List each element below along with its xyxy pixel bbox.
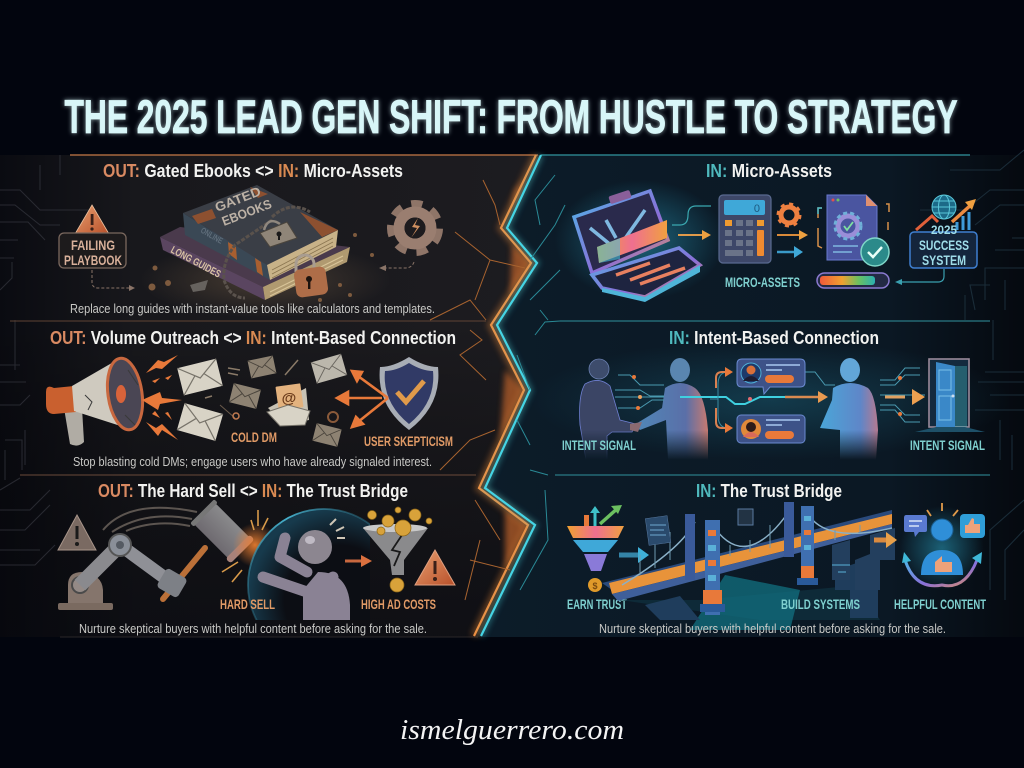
label: intent signal left: INTENT SIGNAL: [562, 437, 636, 453]
icon: document with gear and check: [818, 195, 889, 266]
panel: out the hard sell: [57, 484, 456, 636]
label: cold dm: COLD DM: [231, 429, 277, 445]
icon: chained locked books: [140, 184, 390, 318]
label: high ad costs: HIGH AD COSTS: [361, 596, 436, 612]
icon: megaphone: [46, 356, 147, 446]
icon: success funnel: $: [592, 581, 598, 591]
icon: warning failing playbook: FAILING: [71, 237, 115, 253]
arrow: bridge to helpful content: [874, 532, 897, 548]
icon: suspension bridge: [602, 502, 895, 630]
icon: open door: [915, 359, 985, 432]
icon: small gear and arrows: [777, 204, 808, 258]
icon: 2025 success system: [895, 195, 977, 285]
icon: broken funnel with coins: [363, 507, 432, 592]
signal network lines: [615, 368, 925, 428]
arrow: hard sell to ad costs: [345, 555, 372, 567]
arrows: orange flow: [716, 367, 925, 433]
icon: profile card bottom: [737, 415, 805, 443]
heading: IN: The Trust Bridge: [696, 481, 842, 501]
icon: 2025 success system: SYSTEM: [922, 252, 966, 268]
label: user skepticism: USER SKEPTICISM: [364, 433, 453, 449]
glow behind figures: [530, 340, 1010, 460]
heading: IN: Micro-Assets: [706, 161, 832, 181]
label: intent signal right: INTENT SIGNAL: [910, 437, 985, 453]
icon: warning failing playbook: [59, 205, 135, 291]
icon: open envelope with at sign: [267, 383, 310, 426]
icon: right figure: [820, 358, 878, 460]
caption: Nurture skeptical buyers with helpful content before asking for the sale.: [599, 622, 946, 636]
icon: chained locked books: ONLINE: [199, 225, 225, 246]
icon: chained locked books: GATED: [213, 184, 263, 215]
label: build systems: BUILD SYSTEMS: [781, 596, 860, 612]
icon: success funnel: [567, 505, 624, 592]
icons: flying envelopes: [177, 354, 347, 447]
label: earn trust: EARN TRUST: [567, 596, 627, 612]
icon: progress bar: [817, 273, 889, 288]
footer website: ismelguerrero.com: [400, 715, 624, 746]
icon: 2025 success system: 2025: [931, 223, 957, 237]
label: hard sell: HARD SELL: [220, 596, 275, 612]
icon: impact burst: [222, 510, 277, 582]
icon: open envelope with at sign: @: [282, 390, 296, 407]
icon: calculator: 0: [754, 203, 760, 215]
icon: chained locked books: EBOOKS: [220, 196, 274, 229]
heading: OUT: The Hard Sell <> IN: The Trust Bridge: [98, 481, 408, 501]
icon: warning triangle orange: [415, 550, 455, 585]
caption: Nurture skeptical buyers with helpful content before asking for the sale.: [79, 622, 427, 636]
icon: warning failing playbook: PLAYBOOK: [64, 252, 122, 268]
caption: Stop blasting cold DMs; engage users who have already signaled interest.: [73, 455, 432, 469]
frame and zigzag divider: [10, 155, 990, 637]
heading: OUT: Volume Outreach <> IN: Intent-Based Connection: [50, 328, 456, 348]
icon: chained locked books: LONG GUIDES: [169, 244, 223, 280]
icon: handshake figures: [580, 358, 708, 460]
heading: IN: Intent-Based Connection: [669, 328, 879, 348]
panel: in the trust bridge: [567, 481, 986, 636]
icon: robot arm with hammer: [50, 499, 255, 611]
caption: Replace long guides with instant-value tools like calculators and templates.: [70, 302, 435, 316]
icon: shield: [380, 357, 438, 430]
panel: out gated ebooks: [59, 161, 443, 318]
icon: defended person: [247, 508, 370, 620]
icon: 2025 success system: SUCCESS: [919, 237, 969, 253]
arrow: funnel to bridge: [619, 547, 649, 563]
panel backdrop: [0, 150, 1024, 637]
label: micro-assets: MICRO-ASSETS: [725, 274, 800, 290]
icon: toolbox: [555, 180, 725, 302]
icon: lightning bolts: [142, 355, 182, 440]
icon: profile card top: [737, 359, 805, 394]
heading: OUT: Gated Ebooks <> IN: Micro-Assets: [103, 161, 403, 181]
icon: warning triangle grey: [58, 515, 96, 550]
arrow: toolbox to calculator: [672, 206, 711, 240]
panel: in micro-assets: [555, 161, 977, 302]
panel: in intent-based connection: [562, 330, 985, 458]
icon: helpful content person: [900, 503, 985, 590]
icon: broken gear: [379, 200, 443, 271]
panel: out volume outreach: [46, 328, 456, 469]
icon: calculator: [719, 195, 771, 263]
arrows: skepticism deflecting: [337, 371, 388, 427]
